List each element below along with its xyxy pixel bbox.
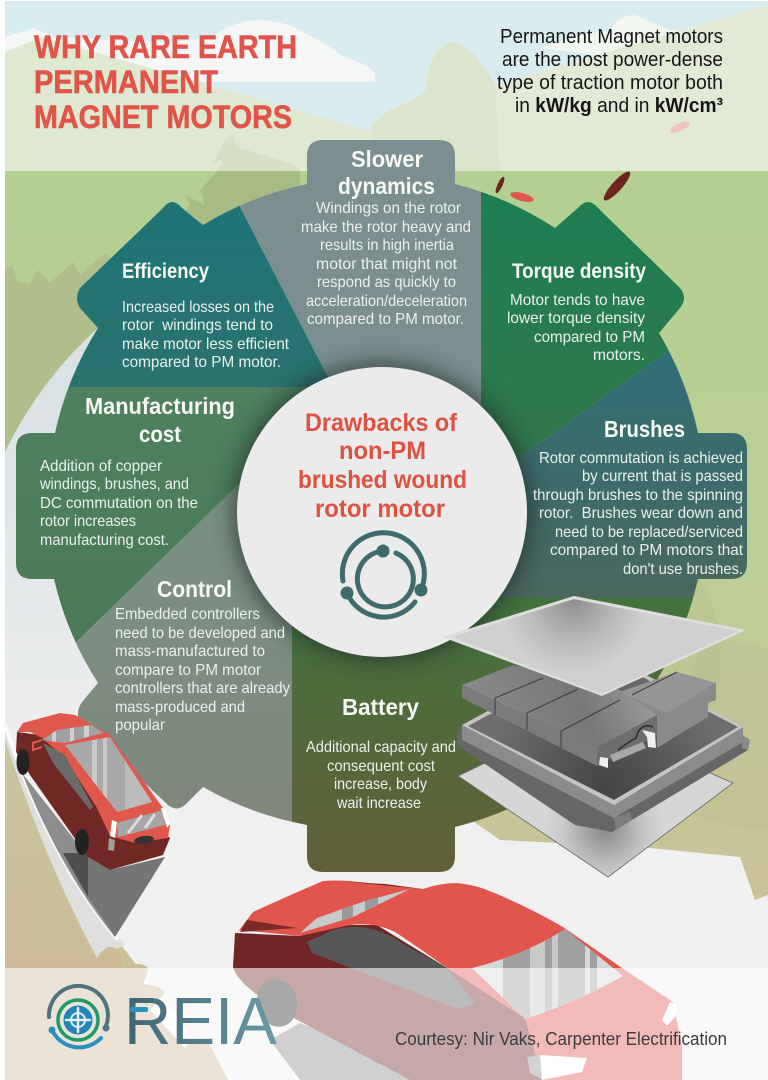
text: torque density: compared to PM [534, 329, 645, 346]
text: manufacturing cost [39, 393, 235, 549]
text: slower dynamics: make the rotor heavy and [301, 219, 471, 236]
text: torque density: lower torque density [507, 310, 645, 327]
car rear window [300, 889, 410, 933]
text: manufacturing cost: manufacturing cost. [40, 532, 169, 549]
text: control: mass-manufactured to [115, 643, 265, 660]
car side [233, 925, 543, 1080]
REIA logo [48, 984, 277, 1059]
lower plate [458, 762, 733, 877]
logo wordmark: REIA [124, 984, 277, 1059]
text: torque density: Motor tends to have [510, 292, 645, 309]
title: WHY RARE EARTH [34, 29, 297, 65]
panel: control [76, 484, 292, 822]
large red car [233, 880, 682, 1080]
centre heading: Drawbacks of [305, 409, 458, 437]
text: efficiency: make motor less efficient [122, 336, 290, 353]
car roof and hood [237, 880, 682, 1080]
centre heading: non-PM [339, 437, 426, 465]
title: PERMANENT [34, 64, 218, 100]
title [34, 29, 297, 135]
text: brushes: Brushes [604, 416, 685, 442]
centre heading: brushed wound [298, 466, 467, 494]
text: manufacturing cost: rotor increases [40, 513, 136, 530]
text: brushes: need to be replaced/serviced [555, 524, 743, 541]
text: battery [306, 694, 456, 812]
text: slower dynamics: dynamics [338, 173, 435, 199]
text: control [115, 576, 290, 734]
tray [457, 650, 750, 832]
text: control: mass-produced and [115, 699, 245, 716]
text: torque density: motors. [593, 347, 645, 364]
car body [16, 732, 170, 870]
panel: efficiency [68, 202, 328, 387]
text: manufacturing cost: cost [139, 421, 181, 447]
title: MAGNET MOTORS [34, 99, 292, 135]
text: control: compare to PM motor [115, 662, 262, 679]
car side window [307, 927, 475, 1009]
text: torque density: Torque density [512, 260, 646, 283]
car rear detail [240, 920, 297, 932]
centre shadow [232, 362, 532, 662]
battery pack illustration [442, 596, 750, 877]
text: battery: consequent cost [327, 758, 436, 775]
text: brushes: don't use brushes. [623, 561, 743, 578]
car roof [17, 713, 170, 843]
panel: slower dynamics [240, 140, 481, 406]
text: brushes: compared to PM motors that [550, 542, 744, 559]
text: battery: Battery [342, 694, 419, 720]
text: manufacturing cost: windings, brushes, and [39, 476, 189, 493]
centre heading: rotor motor [315, 495, 445, 523]
text: efficiency: Efficiency [122, 260, 209, 283]
panel: brushes [500, 350, 747, 597]
text: control: Control [157, 576, 232, 602]
car lights [527, 1002, 677, 1080]
text: manufacturing cost: DC commutation on the [40, 495, 198, 512]
text: slower dynamics: Windings on the rotor [316, 200, 462, 217]
panel: battery [292, 597, 694, 872]
text: brushes: by current that is passed [582, 468, 743, 485]
road [5, 328, 768, 1080]
text: slower dynamics: Slower [351, 146, 423, 172]
intro text: are the most power-dense [502, 49, 723, 71]
text: torque density [507, 260, 646, 364]
car wheel [251, 975, 303, 1031]
wheel diagram panels [16, 140, 747, 872]
centre heading [298, 409, 467, 523]
logo accent [130, 1007, 148, 1012]
text: manufacturing cost: Manufacturing [85, 393, 235, 419]
intro text: in kW/kg and in kW/cm³ [515, 95, 723, 117]
courtesy credit: Courtesy: Nir Vaks, Carpenter Electrification [395, 1028, 727, 1049]
car wheels [16, 749, 89, 855]
text: battery: wait increase [336, 795, 421, 812]
text: control: controllers that are already [115, 680, 290, 697]
text: efficiency [122, 260, 290, 371]
car spoiler [33, 740, 42, 750]
car windows [42, 722, 170, 851]
text: control: popular [115, 717, 166, 734]
text: brushes: Rotor commutation is achieved [539, 450, 743, 467]
intro text: type of traction motor both [497, 72, 723, 94]
logo mark [48, 986, 110, 1047]
text: efficiency: compared to PM motor. [122, 354, 281, 371]
text: slower dynamics: acceleration/deceleration [306, 293, 467, 310]
text: efficiency: rotor windings tend to [122, 317, 273, 334]
text: brushes: through brushes to the spinning [533, 487, 743, 504]
panel: manufacturing cost [16, 387, 308, 642]
battery modules [462, 665, 716, 768]
footer band [5, 968, 768, 1080]
text: slower dynamics: respond as quickly to [317, 274, 456, 291]
text: battery: Additional capacity and [306, 739, 456, 756]
text: control: need to be developed and [115, 625, 285, 642]
top plate [442, 596, 746, 696]
text: slower dynamics: motor that might not [316, 256, 458, 273]
text: efficiency: Increased losses on the [122, 299, 274, 316]
text: slower dynamics: results in high inertia [320, 237, 454, 254]
intro text [497, 26, 723, 117]
text: slower dynamics: compared to PM motor. [307, 311, 464, 328]
car windshield [472, 929, 623, 1019]
text: battery: increase, body [334, 776, 427, 793]
text: control: Embedded controllers [115, 606, 260, 623]
centre circle [237, 367, 527, 657]
icon: rotor rings [342, 533, 425, 617]
text: manufacturing cost: Addition of copper [40, 458, 163, 475]
text: brushes: rotor. Brushes wear down and [539, 505, 743, 522]
intro text: Permanent Magnet motors [500, 26, 723, 48]
leaves [494, 119, 692, 204]
small red car [16, 713, 170, 937]
text: brushes [533, 416, 744, 578]
car shadow [270, 1023, 440, 1080]
text: slower dynamics [301, 146, 471, 328]
panel: torque density [481, 192, 684, 458]
car shadow [22, 773, 165, 937]
